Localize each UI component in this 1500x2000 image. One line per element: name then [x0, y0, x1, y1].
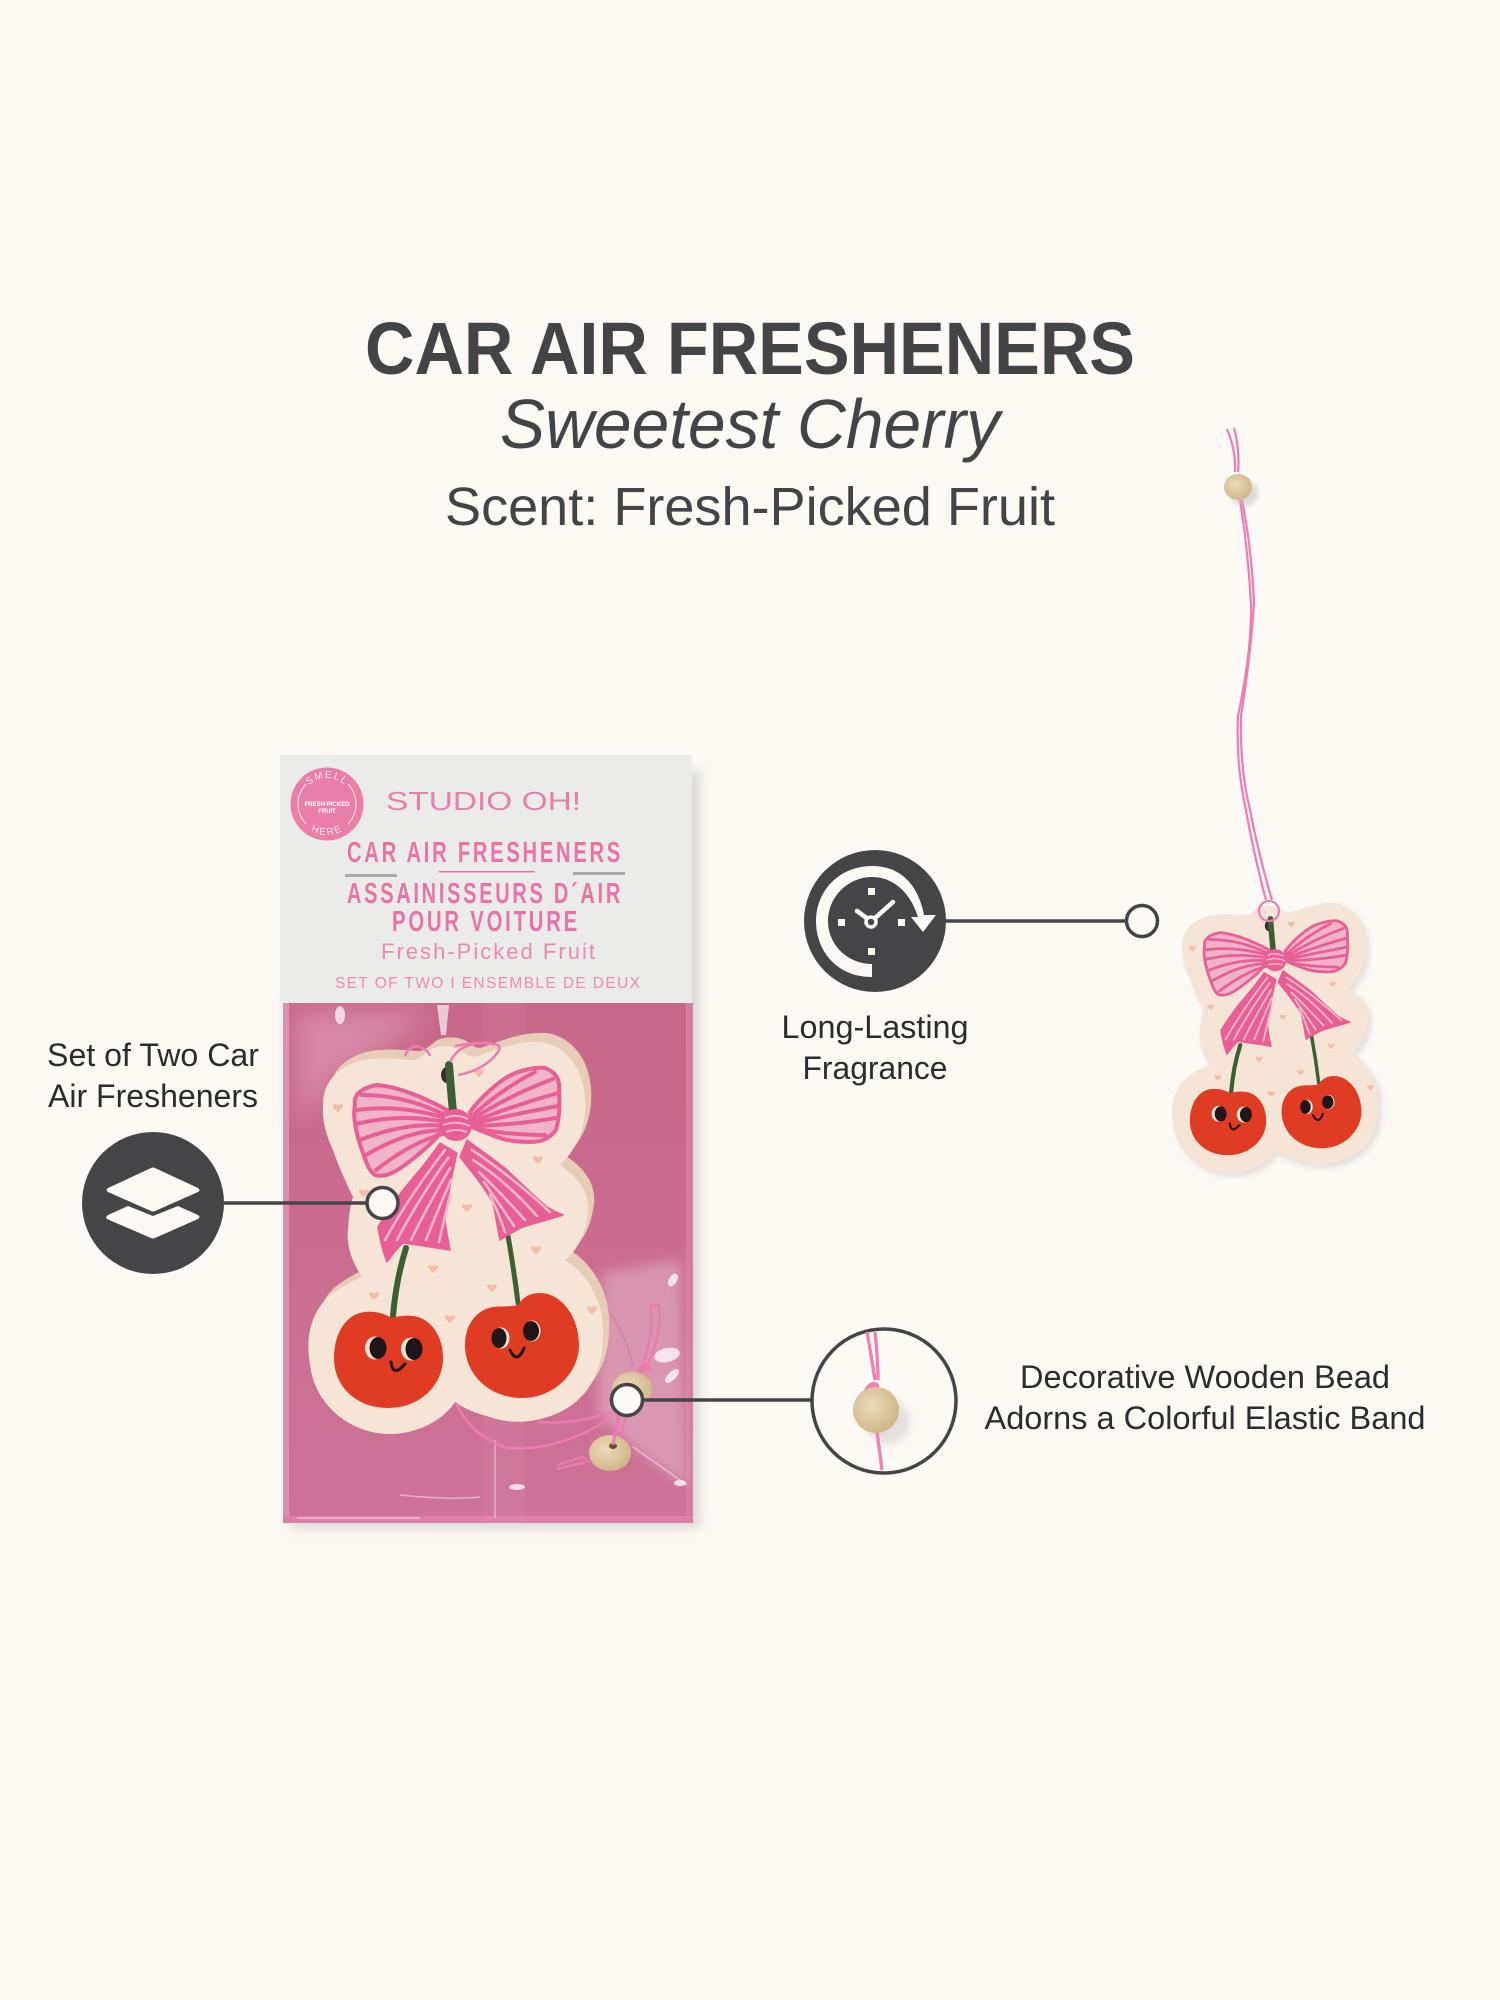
elastic strings and wooden beads	[456, 1305, 659, 1471]
card headings: POUR VOITURE	[392, 906, 580, 938]
marker dot	[612, 1384, 642, 1416]
callout text	[47, 1037, 259, 1114]
scent sticker: FRUIT	[318, 809, 336, 815]
callout text: Fragrance	[802, 1050, 948, 1086]
callout: wooden bead	[612, 1329, 1426, 1473]
scent sticker	[290, 768, 364, 840]
bead detail circle	[812, 1329, 956, 1473]
elastic loop	[1259, 901, 1279, 921]
freshener card	[1172, 903, 1378, 1173]
callout: set of two	[47, 1037, 398, 1274]
subtitle: Sweetest Cherry	[500, 385, 1004, 463]
set of two line: SET OF TWO I ENSEMBLE DE DEUX	[335, 975, 641, 992]
callout text: Decorative Wooden Bead	[1020, 1359, 1390, 1395]
brand name: STUDIO OH!	[386, 786, 581, 816]
callout text	[782, 1009, 968, 1086]
callout text: Adorns a Colorful Elastic Band	[984, 1400, 1426, 1436]
card headings: CAR AIR FRESHENERS	[347, 837, 623, 869]
connector line	[946, 919, 1127, 923]
card headings: ASSAINISSEURS D´AIR	[347, 878, 623, 910]
title: CAR AIR FRESHENERS	[365, 307, 1135, 390]
marker dot	[367, 1188, 398, 1218]
marker dot	[1126, 906, 1158, 936]
wooden bead	[1224, 474, 1258, 506]
elastic loop at the top	[405, 1043, 500, 1075]
callout text: Set of Two Car	[47, 1037, 259, 1073]
scent sticker: FRESH-PICKED	[304, 802, 350, 808]
card headings	[347, 837, 623, 938]
scent name on card: Fresh-Picked Fruit	[381, 939, 595, 964]
hanging air freshener	[1172, 428, 1382, 1177]
header card	[280, 755, 692, 1003]
scent sticker: SMELL	[306, 771, 346, 784]
front air freshener	[308, 1042, 603, 1434]
icon: layers	[82, 1132, 224, 1274]
callout text	[984, 1359, 1426, 1436]
callout: long-lasting fragrance	[782, 850, 1158, 1086]
elastic string	[1227, 428, 1272, 900]
product package	[280, 755, 704, 1532]
connector line	[224, 1201, 367, 1205]
connector line	[642, 1398, 812, 1402]
icon: clock with arrow	[804, 850, 946, 992]
pink bag	[283, 1003, 693, 1523]
second air freshener behind	[314, 1033, 609, 1425]
callout text: Long-Lasting	[782, 1009, 968, 1045]
scent line: Scent: Fresh-Picked Fruit	[445, 477, 1055, 537]
scent sticker: HERE	[312, 824, 342, 836]
callout text: Air Fresheners	[48, 1078, 258, 1114]
